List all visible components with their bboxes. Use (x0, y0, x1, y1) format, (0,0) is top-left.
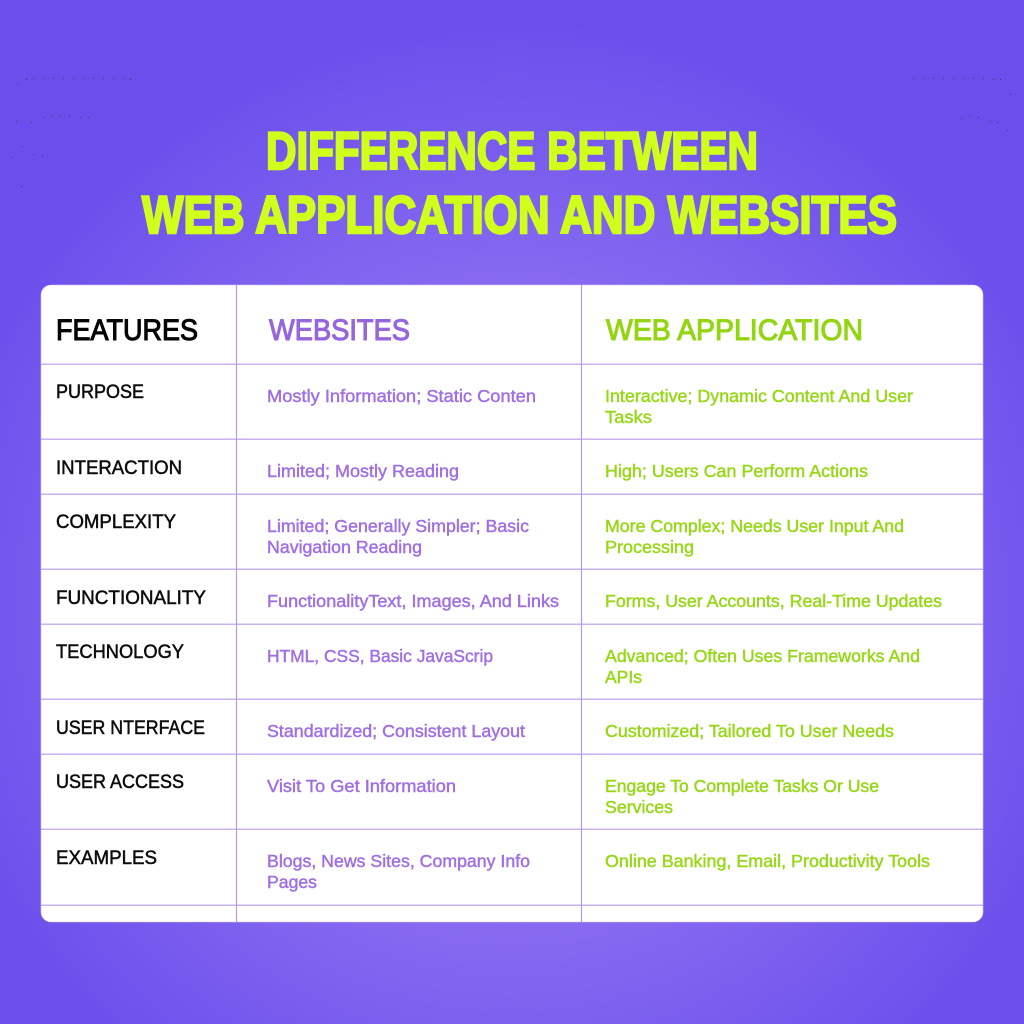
row: purpose: Mostly Information; Static Conten (267, 386, 536, 406)
title: DIFFERENCE BETWEEN (266, 122, 758, 181)
row: functionality: FUNCTIONALITY (56, 588, 206, 609)
row: user access (56, 772, 879, 817)
title: WEB APPLICATION AND WEBSITES (142, 186, 897, 245)
header row: WEB APPLICATION (606, 314, 863, 347)
header row (56, 314, 863, 347)
row: user interface: Standardized; Consistent Layout (267, 721, 525, 741)
row: user interface (56, 718, 894, 741)
row: complexity: Limited; Generally Simpler; Basic (267, 516, 529, 536)
row: user access: Visit To Get Information (267, 776, 456, 796)
row: user access: Services (605, 797, 673, 817)
row: user interface: Customized; Tailored To User Needs (605, 721, 894, 741)
row: complexity: COMPLEXITY (56, 512, 176, 533)
row: technology: HTML, CSS, Basic JavaScrip (267, 646, 493, 666)
row: user access: Engage To Complete Tasks Or Use (605, 776, 879, 796)
row: user access: USER ACCESS (56, 772, 184, 793)
row: complexity: More Complex; Needs User Input And (605, 516, 904, 536)
row: examples (56, 848, 930, 892)
row: purpose (56, 382, 913, 427)
row: functionality (56, 588, 942, 611)
row: interaction: Limited; Mostly Reading (267, 461, 459, 481)
row: technology: TECHNOLOGY (56, 642, 184, 663)
title (142, 122, 897, 245)
row: interaction: INTERACTION (56, 458, 182, 479)
row: purpose: Interactive; Dynamic Content And User (605, 386, 913, 406)
row: complexity: Processing (605, 537, 694, 557)
row: technology: APIs (605, 667, 642, 687)
decorative dots: top left (12, 78, 131, 187)
row: purpose: PURPOSE (56, 382, 144, 403)
row: functionality: Forms, User Accounts, Real-Time Updates (605, 591, 942, 611)
row: technology: Advanced; Often Uses Frameworks And (605, 646, 920, 666)
row: user interface: USER NTERFACE (56, 718, 205, 739)
row: interaction: High; Users Can Perform Actions (605, 461, 868, 481)
table grid lines (41, 285, 983, 922)
row: examples: EXAMPLES (56, 848, 157, 869)
table card (41, 285, 983, 922)
row: interaction (56, 458, 868, 481)
header row: FEATURES (56, 314, 198, 347)
row: purpose: Tasks (605, 407, 652, 427)
header row: WEBSITES (269, 314, 410, 347)
decorative dots: top right (913, 78, 1011, 131)
row: examples: Blogs, News Sites, Company Info (267, 851, 530, 871)
row: examples: Pages (267, 872, 317, 892)
row: functionality: FunctionalityText, Images, And Links (267, 591, 559, 611)
row: complexity (56, 512, 904, 557)
row: examples: Online Banking, Email, Productivity Tools (605, 851, 930, 871)
row: technology (56, 642, 920, 687)
row: complexity: Navigation Reading (267, 537, 422, 557)
comparison table (41, 285, 983, 922)
